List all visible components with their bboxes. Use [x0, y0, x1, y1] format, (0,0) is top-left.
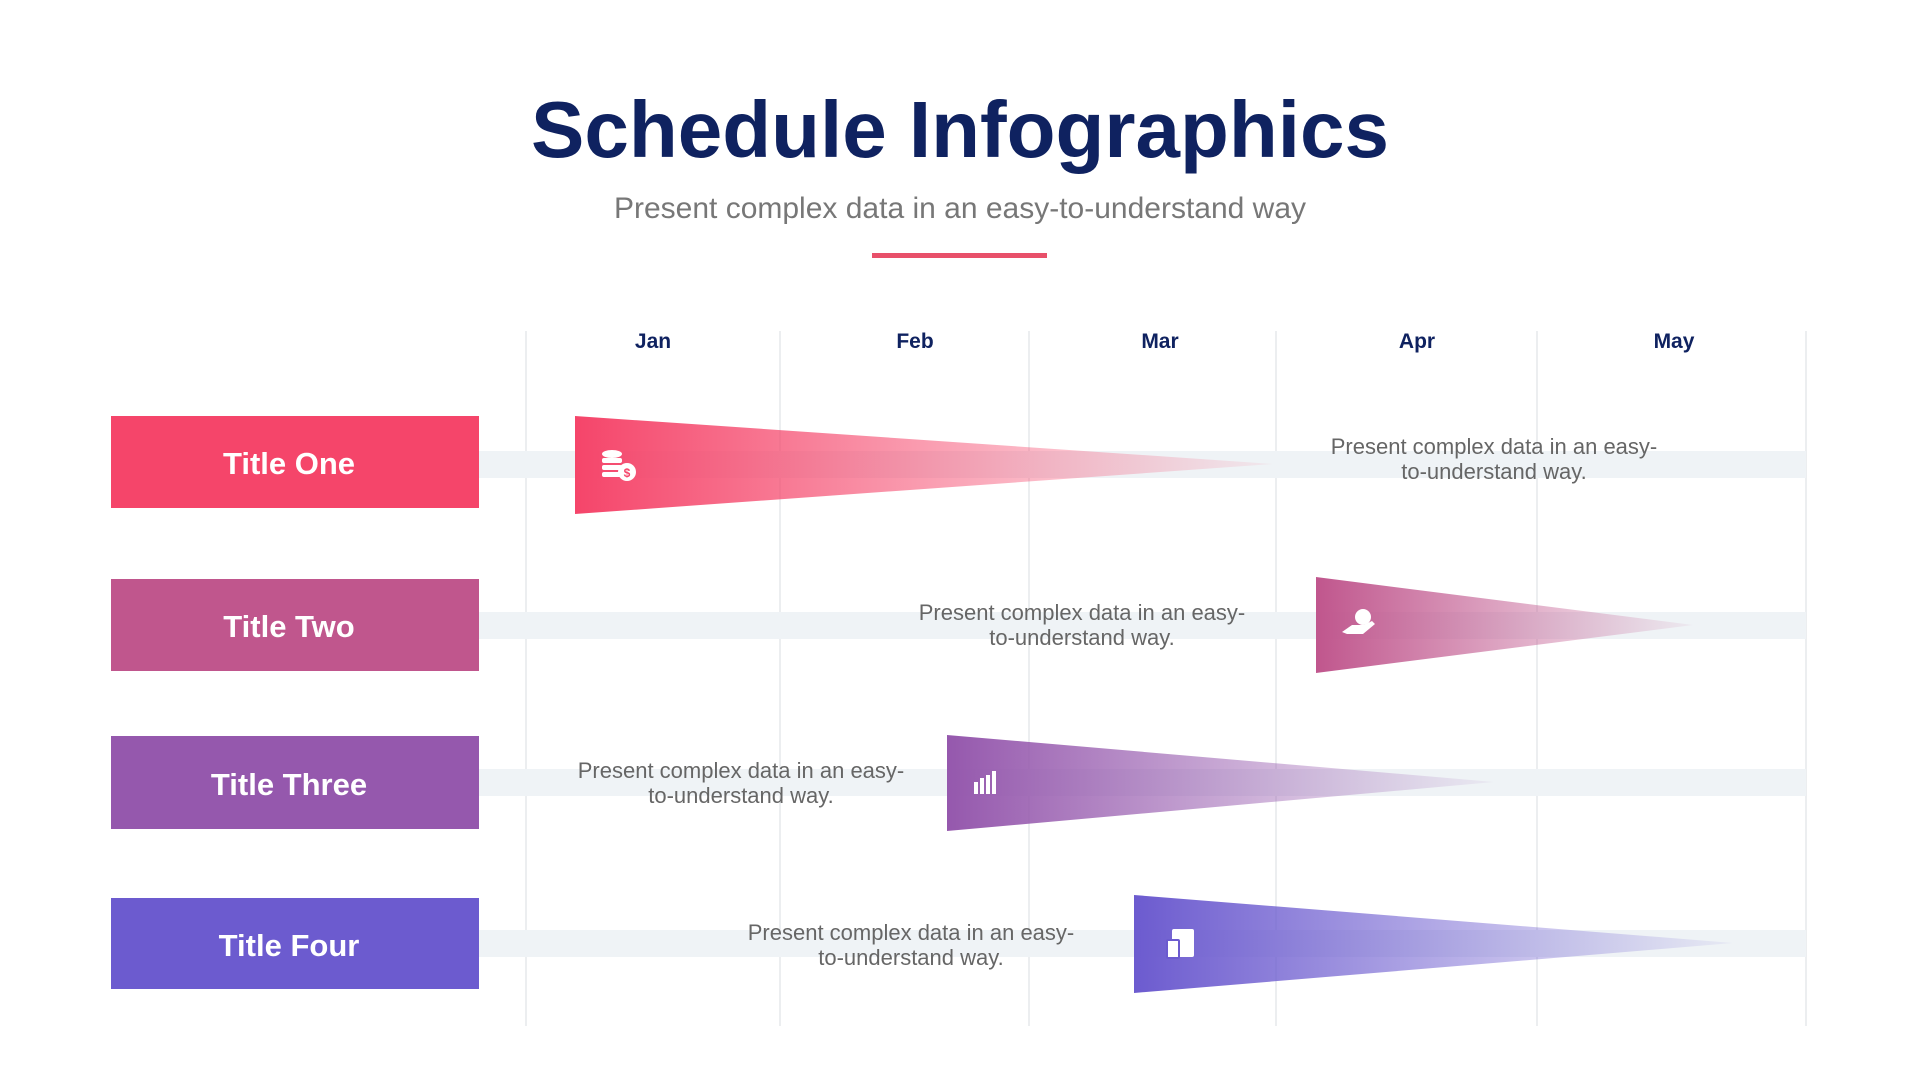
row 4: Title Four: Present complex data in an easy-	[748, 920, 1074, 945]
row 1: Title One: Present complex data in an easy-	[1331, 434, 1657, 459]
row 4: Title Four: Title Four	[219, 928, 359, 963]
month headers: Feb	[896, 330, 934, 353]
title: Schedule Infographics	[531, 85, 1389, 174]
row 2: Title Two: to-understand way.	[989, 625, 1175, 650]
row 4: Title Four	[111, 895, 1733, 993]
row 4: Title Four: to-understand way.	[818, 945, 1004, 970]
month headers: Mar	[1141, 330, 1179, 353]
row 3: Title Three: to-understand way.	[648, 783, 834, 808]
row 1: Title One: $	[624, 466, 631, 480]
row 1: Title One: Title One	[223, 446, 355, 481]
accent underline	[872, 253, 1047, 258]
row 3: Title Three: Present complex data in an easy-	[578, 758, 904, 783]
month headers: Jan	[635, 330, 671, 353]
subtitle: Present complex data in an easy-to-understand way	[614, 192, 1306, 225]
row 2: Title Two: Present complex data in an easy-	[919, 600, 1245, 625]
row 1: Title One	[111, 416, 1657, 514]
month headers: May	[1654, 330, 1695, 353]
row 3: Title Three: Title Three	[211, 767, 367, 802]
row 2: Title Two	[111, 577, 1693, 673]
row 1: Title One: to-understand way.	[1401, 459, 1587, 484]
row 3: Title Three	[111, 735, 1494, 831]
row 2: Title Two: Title Two	[223, 609, 355, 644]
month headers: Apr	[1399, 330, 1435, 353]
month headers	[635, 330, 1695, 353]
